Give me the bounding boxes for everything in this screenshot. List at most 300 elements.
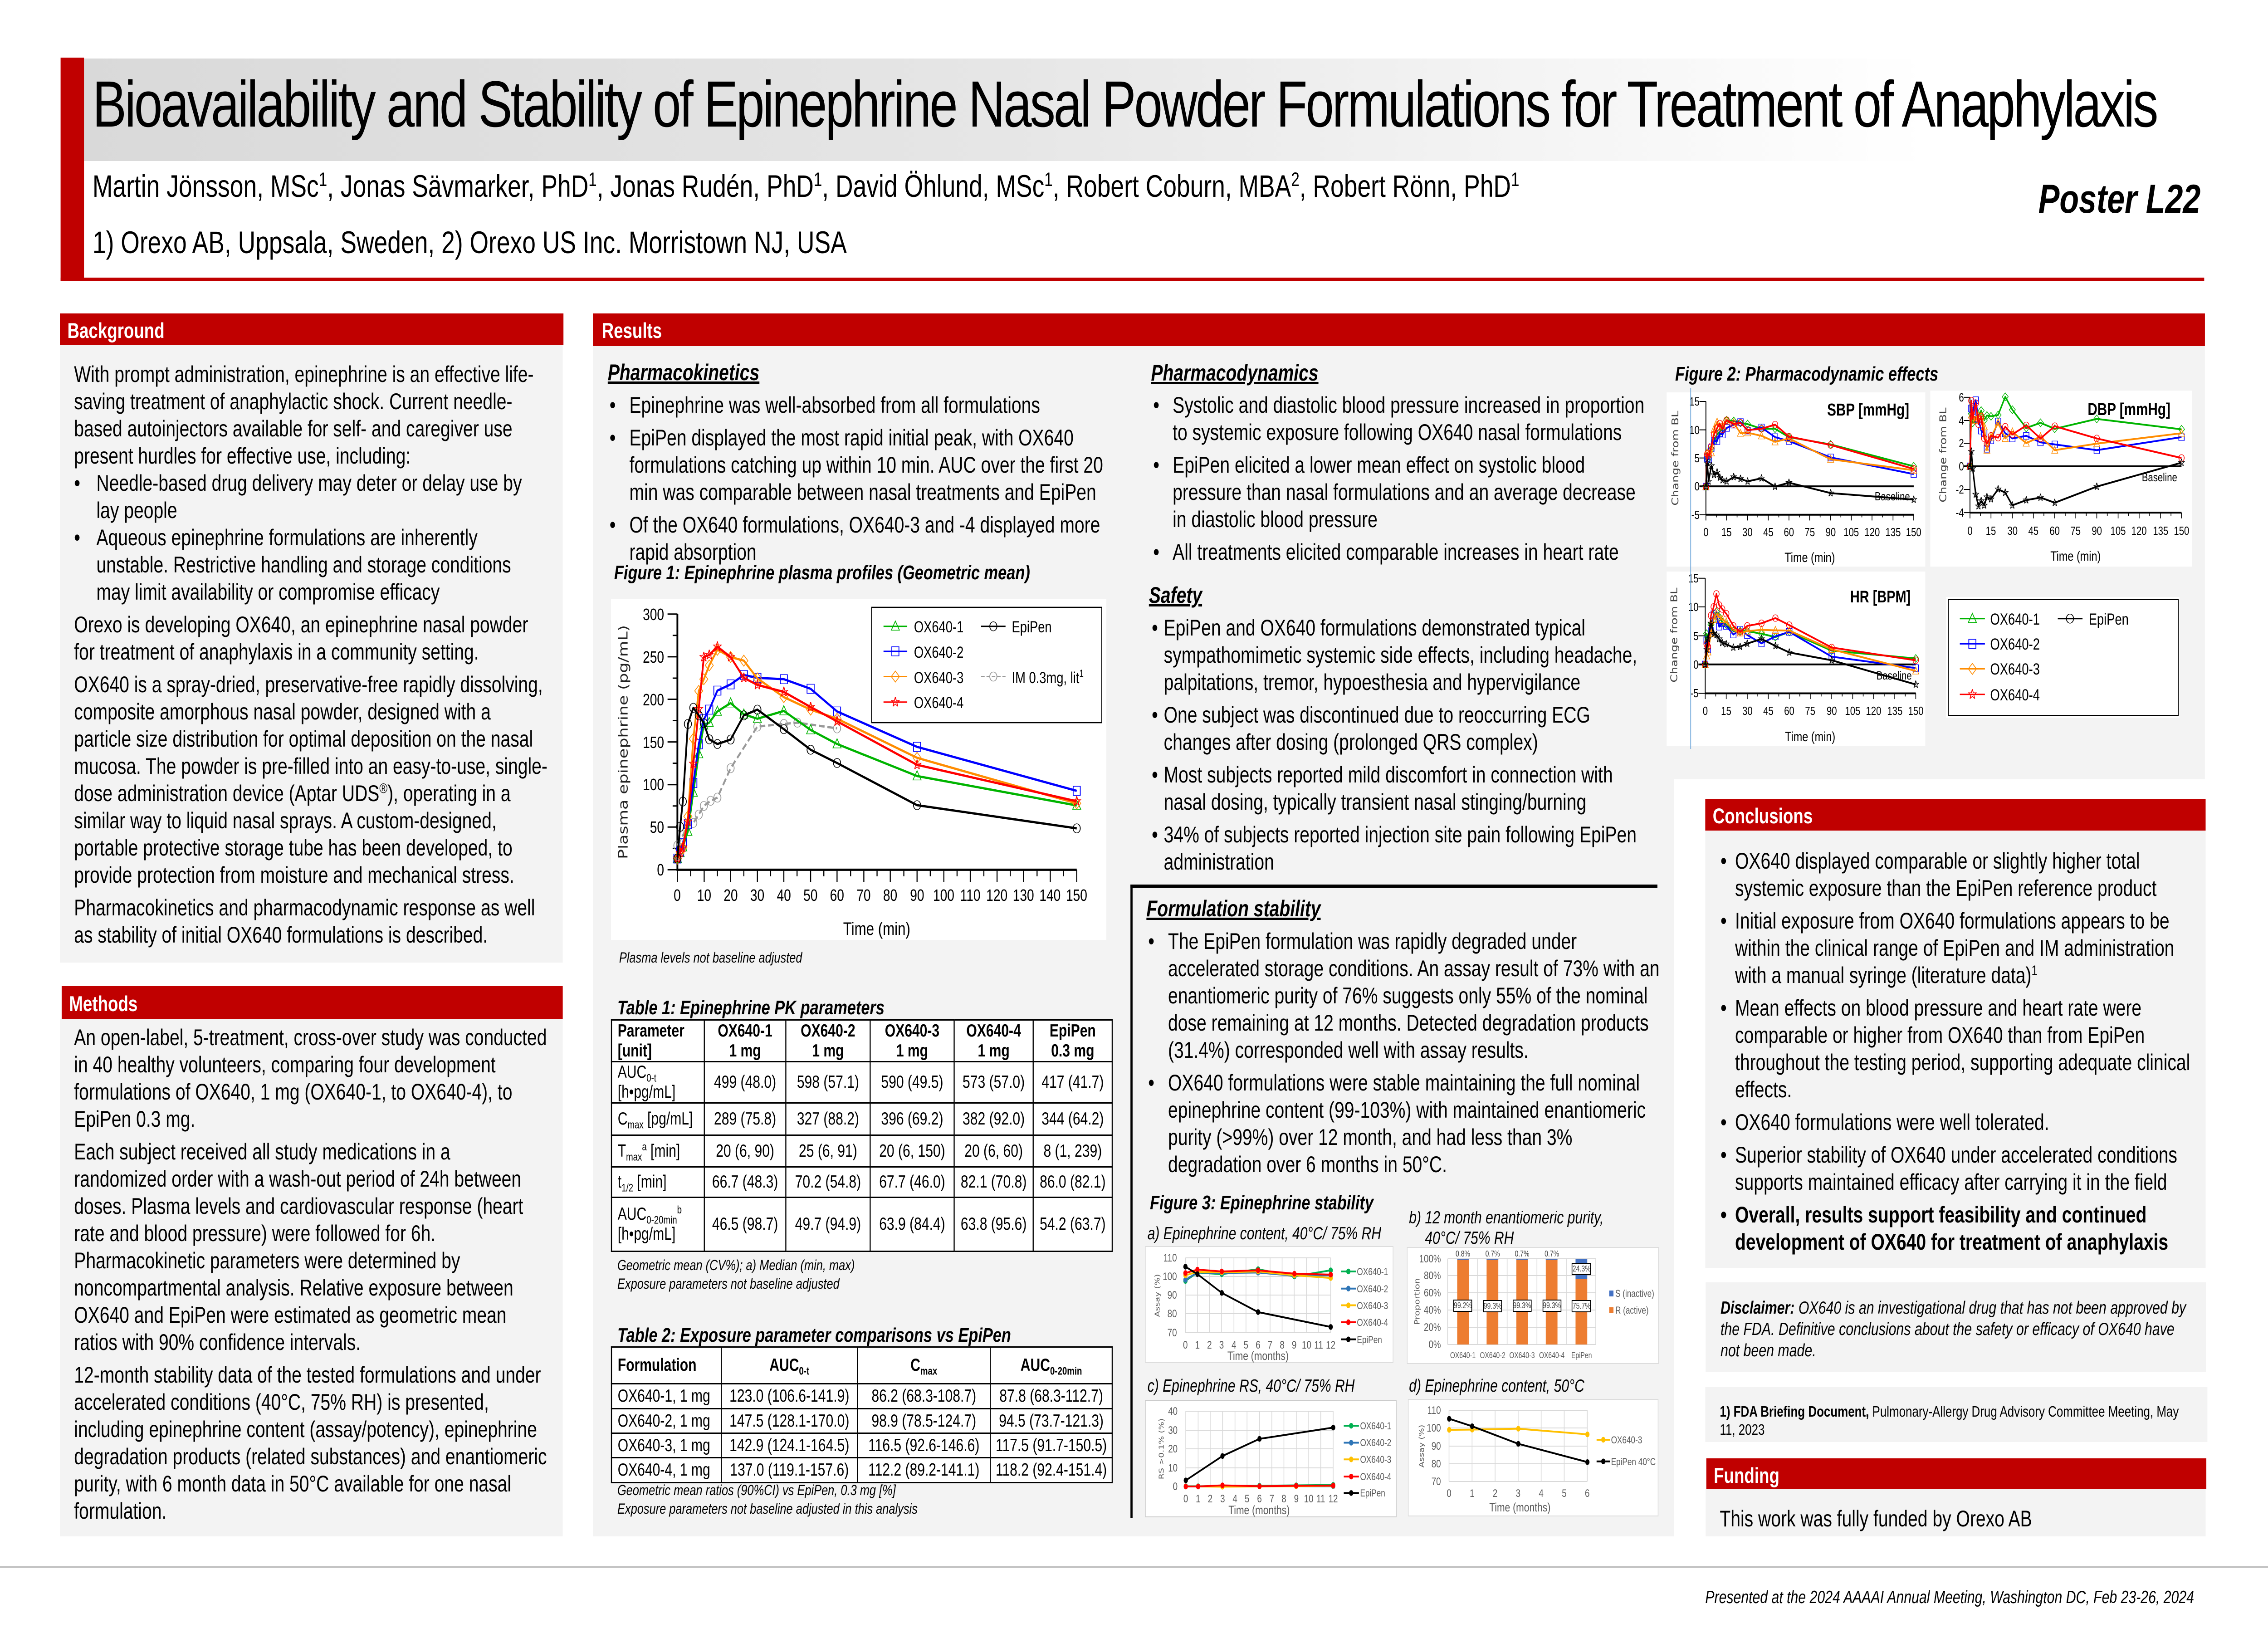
chart b: enantiomeric purity: 0.7% (1515, 1249, 1529, 1258)
panel: background body (60, 345, 563, 963)
figure 1 axis labels: 150 (1066, 886, 1087, 905)
table 1: PK parameters: Tmaxa [min] (618, 1141, 680, 1163)
methods text: OX640 and EpiPen were estimated as geometric mean (74, 1302, 507, 1328)
background heading (60, 313, 563, 345)
chart: DBP: 0 (1959, 460, 1964, 473)
panel: funding body (1706, 1489, 2205, 1536)
disclaimer text: not been made. (1721, 1341, 1816, 1360)
chart c: epinephrine related substances: 3 (1220, 1493, 1225, 1505)
chart: HR (1667, 572, 1926, 746)
chart a: epinephrine content 40C: 100 (1163, 1271, 1177, 1283)
panel: disclaimer (1706, 1282, 2206, 1372)
figure 2 legend: OX640-4 (1990, 686, 2040, 704)
chart b: enantiomeric purity: 99.3% (1513, 1301, 1531, 1310)
pharmacokinetics bullets: rapid absorption (630, 539, 757, 565)
pharmacokinetics bullets: min was comparable between nasal treatments and EpiPen (630, 479, 1096, 505)
methods heading (62, 986, 563, 1019)
disclaimer text: the FDA. Definitive conclusions about the safety or efficacy of OX640 have (1721, 1320, 2175, 1339)
pharmacokinetics bullets: Epinephrine was well-absorbed from all formulations (630, 392, 1040, 418)
table 1: PK parameters: 1 mg (729, 1041, 761, 1061)
chart: HR: 75 (1805, 704, 1815, 718)
methods text: including epinephrine content (assay/potency), epinephrine (74, 1417, 537, 1442)
background heading: Background (67, 318, 165, 342)
figure 1 legend: 1 (1079, 668, 1084, 679)
figure 1 axis labels: 30 (750, 886, 764, 905)
chart a: epinephrine content 40C: OX640-1 (1357, 1266, 1388, 1277)
background text: composite amorphous nasal powder, designed with a (74, 699, 491, 724)
chart b: enantiomeric purity: OX640-2 (1480, 1351, 1505, 1360)
figure 1 legend: OX640-4 (914, 694, 963, 712)
chart d: epinephrine content 50C: 2 (1493, 1487, 1497, 1500)
chart: HR: 30 (1742, 704, 1753, 718)
reference text: 11, 2023 (1720, 1422, 1765, 1438)
conclusions bullets: systemic exposure than the EpiPen reference product (1735, 875, 2156, 901)
chart b: enantiomeric purity: 0% (1428, 1339, 1441, 1351)
chart c: epinephrine related substances: 12 (1329, 1493, 1338, 1505)
formulation stability bullets: epinephrine content (99-103%) with maintained enantiomeric (1168, 1097, 1646, 1123)
chart: SBP: 0 (1703, 525, 1709, 539)
pharmacodynamics bullets: in diastolic blood pressure (1173, 507, 1378, 532)
figure 1 axis labels: 20 (723, 886, 738, 905)
chart: HR: 105 (1845, 704, 1860, 718)
chart b: enantiomeric purity (1407, 1208, 1658, 1364)
table 2: exposure comparisons: 117.5 (91.7-150.5) (996, 1435, 1107, 1455)
chart: DBP: DBP [mmHg] (2087, 400, 2170, 419)
chart c: epinephrine related substances: 5 (1245, 1493, 1249, 1505)
chart c: epinephrine related substances: 1 (1196, 1493, 1201, 1505)
table 1: PK parameters: 499 (48.0) (714, 1072, 776, 1092)
table 1: PK parameters: 54.2 (63.7) (1040, 1214, 1106, 1234)
chart a: epinephrine content 40C: 1 (1195, 1339, 1200, 1351)
chart c: epinephrine related substances: Time (months) (1228, 1503, 1290, 1517)
header red rule (61, 278, 2204, 281)
chart a: epinephrine content 40C: Assay (%) (1154, 1274, 1161, 1317)
table 1: PK parameters: 590 (49.5) (881, 1072, 943, 1092)
background text: Needle-based drug delivery may deter or delay use by (96, 470, 522, 496)
reference text (1720, 1403, 2179, 1439)
safety bullets: changes after dosing (prolonged QRS complex) (1164, 729, 1538, 755)
conclusions bullets: OX640 displayed comparable or slightly higher total (1735, 848, 2140, 874)
chart c: epinephrine related substances: OX640-3 (1360, 1454, 1391, 1465)
chart: HR: 45 (1763, 704, 1774, 718)
table 2: exposure comparisons: 86.2 (68.3-108.7) (871, 1386, 976, 1406)
figure 1 legend: EpiPen (1012, 618, 1052, 636)
chart c: epinephrine related substances: RS >0.1% (%) (1158, 1418, 1166, 1479)
table 1 notes (617, 1256, 855, 1293)
conclusions heading (1705, 799, 2205, 831)
chart d: epinephrine content 50C: 1 (1470, 1487, 1475, 1500)
chart b: enantiomeric purity: OX640-1 (1450, 1351, 1476, 1360)
table 1: PK parameters: 67.7 (46.0) (879, 1172, 945, 1192)
chart a: epinephrine content 40C: 12 (1326, 1339, 1335, 1351)
background text: unstable. Restrictive handling and storage conditions (96, 552, 511, 577)
table 1: PK parameters: EpiPen (1050, 1021, 1096, 1041)
chart a: epinephrine content 40C: OX640-4 (1357, 1317, 1388, 1328)
methods text (74, 1024, 547, 1530)
results heading (593, 313, 2205, 346)
chart c: epinephrine related substances: 6 (1257, 1493, 1262, 1505)
chart b: enantiomeric purity: 20% (1424, 1321, 1441, 1334)
chart d: epinephrine content 50C: 0 (1447, 1487, 1452, 1500)
footer text: Presented at the 2024 AAAAI Annual Meeting, Washington DC, Feb 23-26, 2024 (1705, 1588, 2194, 1607)
title banner gradient (84, 59, 1927, 161)
pharmacodynamics bullets: All treatments elicited comparable increases in heart rate (1173, 539, 1619, 565)
formulation stability bullets: OX640 formulations were stable maintaining the full nominal (1168, 1070, 1640, 1095)
table 1 notes: Geometric mean (CV%); a) Median (min, max) (617, 1257, 855, 1273)
safety bullets: sympathomimetic systemic side effects, including headache, (1164, 642, 1637, 668)
table 1: PK parameters: 598 (57.1) (797, 1072, 859, 1092)
chart: DBP: 4 (1959, 414, 1964, 427)
table 1: PK parameters: AUC0-20minb (618, 1204, 682, 1227)
table 1: PK parameters: [unit] (618, 1041, 652, 1061)
chart group: figure 3 stability (1143, 1211, 1664, 1524)
table 2: exposure comparisons: Cmax (910, 1355, 937, 1378)
chart: HR: 5 (1693, 629, 1699, 643)
figure 2 legend: OX640-3 (1990, 660, 2040, 678)
pharmacodynamics bullets: Systolic and diastolic blood pressure increased in proportion (1173, 392, 1644, 418)
methods text: An open-label, 5-treatment, cross-over study was conducted (74, 1025, 547, 1050)
chart: DBP: -4 (1956, 506, 1964, 519)
chart b: enantiomeric purity: S (inactive) (1615, 1288, 1654, 1299)
chart c: epinephrine related substances: 0 (1183, 1493, 1188, 1505)
chart b: enantiomeric purity: OX640-4 (1539, 1351, 1564, 1360)
table 1: PK parameters: [h•pg/mL] (618, 1224, 675, 1244)
conclusions bullets: supports maintained efficacy after carrying it in the field (1735, 1169, 2167, 1195)
chart: DBP: 105 (2111, 524, 2126, 538)
chart d: epinephrine content 50C: 100 (1427, 1422, 1441, 1434)
chart d: epinephrine content 50C: 70 (1432, 1476, 1441, 1488)
chart: SBP: 5 (1695, 451, 1700, 465)
methods text: 12-month stability data of the tested formulations and under (74, 1362, 541, 1388)
figure 1 axis labels: 0 (657, 861, 664, 879)
figure 2 legend: OX640-1 (1990, 611, 2040, 628)
chart a: epinephrine content 40C: 8 (1280, 1339, 1285, 1351)
chart c: epinephrine related substances: 10 (1304, 1493, 1314, 1505)
chart: DBP: 90 (2092, 524, 2102, 538)
table 1: PK parameters: 63.8 (95.6) (961, 1214, 1026, 1234)
chart: SBP: 90 (1826, 525, 1836, 539)
pharmacokinetics bullets: formulations catching up within 10 min. AUC over the first 20 (630, 452, 1103, 478)
chart d: epinephrine content 50C: Time (months) (1489, 1501, 1550, 1514)
chart a: epinephrine content 40C: OX640-2 (1357, 1283, 1388, 1295)
chart a: epinephrine content 40C: a) Epinephrine content, 40°C/ 75% RH (1148, 1224, 1381, 1243)
table 2 notes: Exposure parameters not baseline adjusted in this analysis (617, 1501, 918, 1517)
formulation stability bullets: degradation over 6 months in 50°C. (1168, 1152, 1447, 1177)
table 1: PK parameters: 417 (41.7) (1041, 1072, 1104, 1092)
funding heading: Funding (1714, 1463, 1779, 1487)
chart: SBP: 150 (1906, 525, 1921, 539)
table 2: exposure comparisons: 142.9 (124.1-164.5) (729, 1435, 849, 1455)
methods text: formulations of OX640, 1 mg (OX640-1, to OX640-4), to (74, 1079, 512, 1105)
table 1: PK parameters: 86.0 (82.1) (1040, 1172, 1106, 1192)
table 1: PK parameters: 25 (6, 91) (799, 1141, 857, 1160)
figure 2 legend: OX640-2 (1990, 636, 2040, 653)
figure 1 axis labels: 300 (643, 605, 664, 624)
chart: HR: Change from BL (1669, 587, 1680, 682)
chart group: figure 2 pharmacodynamic effects (1666, 388, 2197, 751)
safety heading: Safety (1149, 582, 1202, 608)
chart a: epinephrine content 40C: 0 (1183, 1339, 1188, 1351)
table 1: PK parameters: 573 (57.0) (963, 1072, 1025, 1092)
table 1: PK parameters: 20 (6, 150) (879, 1141, 945, 1160)
affiliations: 1) Orexo AB, Uppsala, Sweden, 2) Orexo US Inc. Morristown NJ, USA (93, 225, 847, 260)
table 1: PK parameters: 0.3 mg (1051, 1041, 1094, 1061)
background text: similar way to liquid nasal sprays. A custom-designed, (74, 808, 497, 833)
conclusions bullets: Initial exposure from OX640 formulations appears to be (1735, 908, 2170, 934)
safety bullets (1152, 614, 1637, 881)
chart c: epinephrine related substances: OX640-4 (1360, 1471, 1391, 1482)
chart a: epinephrine content 40C: OX640-3 (1357, 1300, 1388, 1311)
chart: SBP: Baseline (1875, 489, 1910, 503)
pharmacokinetics heading: Pharmacokinetics (608, 360, 759, 385)
table 1: PK parameters: 70.2 (54.8) (795, 1172, 861, 1192)
figure 1 axis labels: 200 (643, 690, 664, 709)
chart a: epinephrine content 40C: 3 (1219, 1339, 1224, 1351)
background text: Aqueous epinephrine formulations are inherently (96, 525, 478, 550)
background text: provide protection from moisture and mechanical stress. (74, 862, 514, 888)
background text: Orexo is developing OX640, an epinephrine nasal powder (74, 612, 528, 637)
chart c: epinephrine related substances: 10 (1168, 1462, 1178, 1474)
chart: HR: 135 (1887, 704, 1902, 718)
chart a: epinephrine content 40C: 9 (1292, 1339, 1296, 1351)
background text (74, 361, 547, 954)
methods text: formulation. (74, 1498, 166, 1524)
table 2: exposure comparisons: OX640-1, 1 mg (618, 1386, 710, 1406)
methods text: rate and blood pressure) were followed for 6h. (74, 1221, 435, 1246)
chart: SBP: Time (min) (1784, 550, 1835, 565)
figure 2 legend (1946, 597, 2180, 718)
pharmacokinetics bullets: Of the OX640 formulations, OX640-3 and -4 displayed more (630, 512, 1100, 538)
chart b: enantiomeric purity: 0.7% (1486, 1249, 1500, 1258)
chart: HR: Baseline (1877, 669, 1912, 682)
pharmacodynamics bullets: EpiPen elicited a lower mean effect on systolic blood (1173, 452, 1585, 478)
figure 1 axis labels: 80 (883, 886, 897, 905)
chart b: enantiomeric purity: 99.3% (1543, 1301, 1561, 1310)
chart b: enantiomeric purity: 99.3% (1484, 1301, 1502, 1310)
figure 1 axis labels: 40 (777, 886, 791, 905)
chart: SBP: 105 (1843, 525, 1859, 539)
table 1: PK parameters: 8 (1, 239) (1043, 1141, 1102, 1160)
chart: DBP: -2 (1956, 483, 1964, 496)
conclusions bullets: comparable or higher from OX640 than from EpiPen (1735, 1022, 2145, 1048)
chart a: epinephrine content 40C: 80 (1168, 1308, 1177, 1320)
figure 1 axis labels: 110 (960, 886, 980, 905)
table 2 title: Table 2: Exposure parameter comparisons vs EpiPen (617, 1324, 1011, 1346)
table 1: PK parameters: 1 mg (812, 1041, 844, 1061)
chart: HR: -5 (1690, 686, 1699, 700)
background text: Pharmacokinetics and pharmacodynamic response as well (74, 895, 535, 920)
reference text: 1) FDA Briefing Document, Pulmonary-Allergy Drug Advisory Committee Meeting, May (1720, 1403, 2179, 1420)
chart d: epinephrine content 50C: 6 (1585, 1487, 1589, 1500)
table 1: PK parameters: OX640-2 (801, 1021, 855, 1041)
safety bullets: 34% of subjects reported injection site pain following EpiPen (1164, 822, 1637, 847)
chart a: epinephrine content 40C: 7 (1268, 1339, 1272, 1351)
chart a: epinephrine content 40C: 10 (1302, 1339, 1311, 1351)
chart b: enantiomeric purity: 100% (1419, 1253, 1441, 1265)
figure 1 axis labels: 60 (830, 886, 844, 905)
figure 1 note: Plasma levels not baseline adjusted (619, 949, 802, 966)
chart: DBP: 6 (1959, 391, 1964, 404)
conclusions bullets: Overall, results support feasibility and continued (1735, 1202, 2146, 1227)
table 2: exposure comparisons: 116.5 (92.6-146.6) (868, 1435, 979, 1455)
chart: SBP: 15 (1721, 525, 1732, 539)
conclusions bullets: with a manual syringe (literature data)1 (1735, 962, 2038, 988)
chart a: epinephrine content 40C: 4 (1232, 1339, 1237, 1351)
chart: HR: 0 (1693, 658, 1699, 671)
chart c: epinephrine related substances: OX640-1 (1360, 1420, 1391, 1432)
table 1: PK parameters: OX640-4 (966, 1021, 1021, 1041)
formulation stability bullets: (31.4%) corresponded well with assay results. (1168, 1037, 1529, 1063)
chart d: epinephrine content 50C: 3 (1516, 1487, 1520, 1500)
panel: conclusions body (1705, 831, 2205, 1268)
chart c: epinephrine related substances: 11 (1316, 1493, 1325, 1505)
background text: based autoinjectors available for self- and caregiver use (74, 416, 513, 441)
table 1: PK parameters: 1 mg (978, 1041, 1010, 1061)
table 1: PK parameters: OX640-1 (718, 1021, 772, 1041)
chart: SBP: 0 (1695, 479, 1700, 493)
footer rule (0, 1566, 2268, 1568)
chart: SBP: Change from BL (1670, 411, 1681, 505)
background text: With prompt administration, epinephrine is an effective life- (74, 362, 534, 387)
chart: HR: 15 (1688, 572, 1699, 585)
chart: SBP (1667, 392, 1926, 567)
chart c: epinephrine related substances (1145, 1376, 1396, 1517)
background text: saving treatment of anaphylactic shock. Current needle- (74, 389, 513, 414)
safety bullets: administration (1164, 849, 1274, 875)
table 2: exposure comparisons (611, 1346, 1113, 1483)
pharmacodynamics bullets (1153, 391, 1644, 571)
pharmacodynamics bullets: to systemic exposure following OX640 nasal formulations (1173, 420, 1622, 445)
chart b: enantiomeric purity: OX640-3 (1509, 1351, 1535, 1360)
table 2: exposure comparisons: 112.2 (89.2-141.1) (868, 1460, 979, 1480)
chart: DBP: Change from BL (1938, 407, 1949, 502)
methods text: EpiPen 0.3 mg. (74, 1106, 195, 1132)
funding heading (1706, 1458, 2206, 1489)
chart d: epinephrine content 50C: Assay (%) (1418, 1425, 1426, 1467)
pharmacodynamics bullets: pressure than nasal formulations and an average decrease (1173, 479, 1636, 505)
chart c: epinephrine related substances: c) Epinephrine RS, 40°C/ 75% RH (1148, 1376, 1355, 1396)
formulation stability bullets (1148, 928, 1660, 1183)
table 2: exposure comparisons: 94.5 (73.7-121.3) (999, 1411, 1104, 1431)
chart a: epinephrine content 40C: 110 (1163, 1252, 1177, 1264)
chart c: epinephrine related substances: 9 (1294, 1493, 1299, 1505)
figure 1 axis labels: 140 (1039, 886, 1061, 905)
chart a: epinephrine content 40C: 90 (1168, 1289, 1177, 1301)
chart c: epinephrine related substances: 20 (1168, 1443, 1178, 1455)
background text: dose administration device (Aptar UDS®), operating in a (74, 780, 511, 806)
authors: Martin Jönsson, MSc1, Jonas Sävmarker, PhD1, Jonas Rudén, PhD1, David Öhlund, MSc1, Robert Coburn, MBA2, Robert Rönn, PhD1 (93, 169, 1519, 204)
conclusions bullets: Mean effects on blood pressure and heart rate were (1735, 995, 2141, 1021)
formulation stability frame top (1130, 885, 1657, 888)
chart d: epinephrine content 50C: OX640-3 (1611, 1434, 1642, 1446)
background text: lay people (96, 498, 177, 523)
chart c: epinephrine related substances: 2 (1208, 1493, 1212, 1505)
methods text: purity, with 6 month data in 50°C available for one nasal (74, 1471, 511, 1496)
conclusions bullets: Superior stability of OX640 under accelerated conditions (1735, 1142, 2177, 1168)
chart: SBP: 45 (1763, 525, 1774, 539)
table 2: exposure comparisons: AUC0-t (769, 1355, 809, 1378)
methods text: Pharmacokinetic parameters were determined by (74, 1248, 460, 1273)
methods text: Each subject received all study medications in a (74, 1139, 450, 1164)
chart: SBP: 120 (1864, 525, 1880, 539)
chart: DBP: 75 (2070, 524, 2081, 538)
table 2: exposure comparisons: 87.8 (68.3-112.7) (999, 1386, 1103, 1406)
figure 1 axis labels: 100 (643, 775, 664, 794)
chart b: enantiomeric purity: 0.8% (1456, 1249, 1470, 1258)
title: Bioavailability and Stability of Epinephrine Nasal Powder Formulations for Treatment of Anaphylaxis (93, 68, 2156, 141)
table 1: PK parameters: [h•pg/mL] (618, 1082, 675, 1102)
background text: portable protective storage tube has been developed, to (74, 835, 513, 861)
figure 1 axis labels: 120 (986, 886, 1007, 905)
conclusions bullets: within the clinical range of EpiPen and IM administration (1735, 935, 2174, 961)
background text: may limit availability or compromise efficacy (96, 579, 440, 605)
disclaimer text: Disclaimer: OX640 is an investigational drug that has not been approved by (1721, 1298, 2186, 1318)
funding text: This work was fully funded by Orexo AB (1720, 1506, 2032, 1531)
table 2 notes (617, 1481, 918, 1518)
chart: SBP: 75 (1805, 525, 1815, 539)
background text: particle size distribution for optimal deposition on the nasal (74, 726, 533, 752)
figure 1 axis labels (616, 605, 1087, 939)
formulation stability bullets: The EpiPen formulation was rapidly degraded under (1168, 929, 1577, 954)
figure 3 title: Figure 3: Epinephrine stability (1150, 1192, 1374, 1214)
table 1: PK parameters: 46.5 (98.7) (712, 1214, 778, 1234)
table 2: exposure comparisons: 118.2 (92.4-151.4) (996, 1460, 1107, 1480)
figure 1 axis labels: 50 (803, 886, 817, 905)
table 2: exposure comparisons: Formulation (618, 1355, 696, 1375)
chart: DBP (1930, 391, 2192, 567)
chart a: epinephrine content 40C: 2 (1207, 1339, 1212, 1351)
figure 1 legend: OX640-2 (914, 644, 963, 661)
table 1 title: Table 1: Epinephrine PK parameters (617, 997, 885, 1019)
chart a: epinephrine content 40C: 5 (1244, 1339, 1248, 1351)
chart: HR: HR [BPM] (1850, 587, 1911, 606)
table 2 notes: Geometric mean ratios (90%CI) vs EpiPen, 0.3 mg [%] (617, 1482, 896, 1498)
chart b: enantiomeric purity: 0.7% (1545, 1249, 1559, 1258)
chart c: epinephrine related substances: 4 (1232, 1493, 1237, 1505)
chart: HR: 15 (1721, 704, 1731, 718)
methods text: randomized order with a wash-out period of 24h between (74, 1166, 521, 1192)
table 1: PK parameters: OX640-3 (885, 1021, 939, 1041)
panel: reference (1705, 1387, 2207, 1442)
methods text: in 40 healthy volunteers, comparing four development (74, 1052, 496, 1077)
chart b: enantiomeric purity: 40% (1424, 1304, 1441, 1316)
figure 1 legend: OX640-1 (914, 618, 963, 636)
table 2: exposure comparisons: OX640-4, 1 mg (618, 1460, 710, 1480)
table 1: PK parameters: 396 (69.2) (881, 1109, 943, 1129)
figure 1 axis labels: 150 (643, 733, 664, 752)
chart: DBP: 45 (2028, 524, 2038, 538)
formulation stability bullets: accelerated storage conditions. An assay result of 73% with an (1168, 956, 1660, 981)
background text: present hurdles for effective use, including: (74, 443, 411, 469)
safety bullets: One subject was discontinued due to reoccurring ECG (1164, 702, 1590, 728)
chart: DBP: Time (min) (2050, 549, 2101, 564)
panel: results background, upper (593, 346, 2205, 779)
chart: HR: 150 (1908, 704, 1923, 718)
chart: DBP: 120 (2131, 524, 2147, 538)
chart a: epinephrine content 40C (1145, 1224, 1393, 1363)
chart: HR: 60 (1784, 704, 1794, 718)
table 1: PK parameters: 344 (64.2) (1041, 1109, 1104, 1129)
figure 1 axis labels: 0 (674, 886, 681, 905)
chart b: enantiomeric purity: Proportion (1413, 1278, 1422, 1325)
figure 1 axis labels: Time (min) (843, 919, 910, 939)
chart: DBP: 60 (2049, 524, 2060, 538)
figure 1 legend (872, 607, 1102, 723)
figure 1 axis labels: 70 (856, 886, 871, 905)
chart d: epinephrine content 50C: d) Epinephrine content, 50°C (1409, 1376, 1585, 1396)
chart b: enantiomeric purity: 75.7% (1573, 1301, 1591, 1310)
pharmacokinetics bullets (610, 391, 1103, 571)
